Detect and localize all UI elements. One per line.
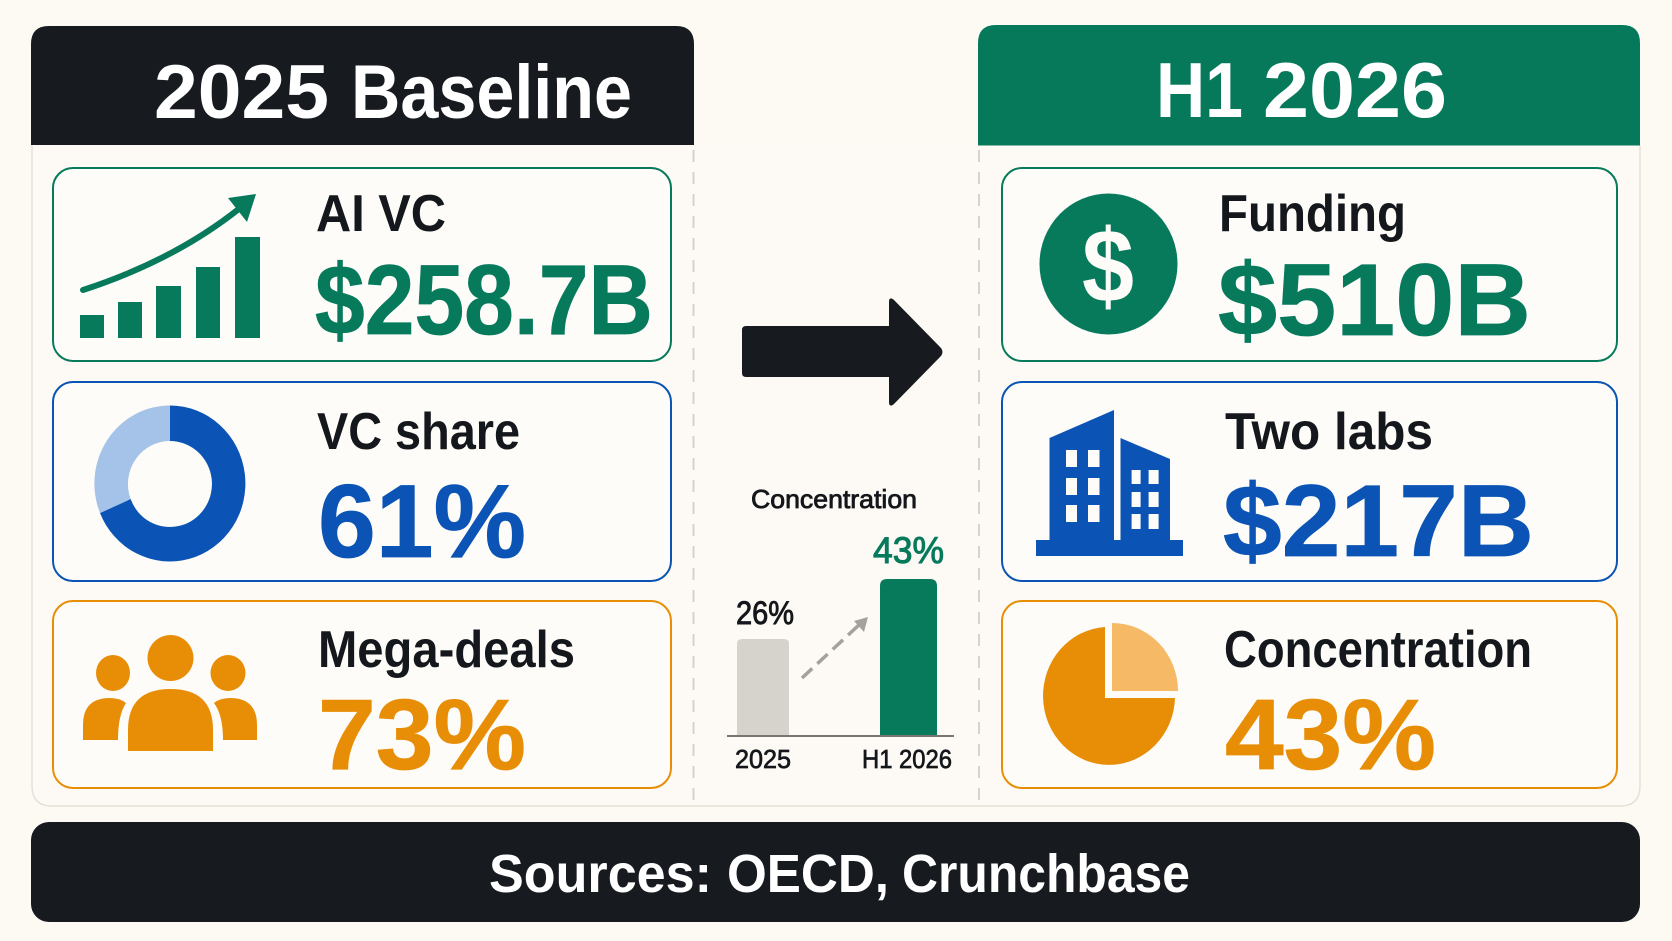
chart: concentration bar chart <box>727 484 954 774</box>
axis label: H1 2026: H1 2026 <box>862 744 952 774</box>
value: $510B: $510B <box>1218 243 1531 357</box>
icon: dollar coin: $ <box>1082 209 1134 325</box>
footer: sources <box>31 822 1640 922</box>
icon: rising bar chart with arrow <box>80 194 260 338</box>
axis label: 2025: 2025 <box>735 744 791 774</box>
arrow: dashed rise <box>802 617 868 678</box>
arrow: baseline to H1 2026 <box>742 298 942 406</box>
card: AI VC <box>53 168 671 361</box>
value: $258.7B: $258.7B <box>315 244 653 355</box>
icon: group of people <box>83 635 257 751</box>
heading: H1 2026: H1 <box>1156 46 1243 134</box>
bar: 2025 <box>737 639 789 736</box>
value: 26%: 26% <box>736 595 794 631</box>
value: 73%: 73% <box>318 679 526 791</box>
panel: 2025 baseline <box>31 26 694 791</box>
bar: H1 2026 <box>880 579 937 736</box>
chart title: Concentration <box>751 484 917 514</box>
label: Concentration: Concentration <box>1224 621 1532 679</box>
card: Mega-deals <box>53 601 671 791</box>
heading: H1 2026 <box>978 25 1640 146</box>
label: Funding: Funding <box>1219 185 1406 243</box>
icon: dollar coin <box>1040 194 1178 334</box>
value: 43%: 43% <box>873 530 944 571</box>
footer: sources: Sources: <box>489 844 712 904</box>
icon: office buildings <box>1036 410 1183 556</box>
icon: pie chart <box>1043 623 1178 765</box>
label: Mega-deals: Mega-deals <box>318 621 575 679</box>
label: VC share: VC share <box>317 403 520 461</box>
heading: 2025 Baseline: 2025 <box>154 50 329 135</box>
card: VC share <box>53 382 671 581</box>
icon: donut chart <box>94 405 245 561</box>
card: Two labs <box>1002 382 1617 581</box>
heading: H1 2026: 2026 <box>1263 46 1447 134</box>
footer: sources: Crunchbase <box>902 844 1190 904</box>
value: 43%: 43% <box>1225 679 1436 791</box>
label: AI VC: AI VC <box>316 185 446 243</box>
value: 61%: 61% <box>318 464 526 580</box>
value: $217B: $217B <box>1223 464 1534 578</box>
heading: 2025 Baseline: Baseline <box>351 50 632 135</box>
card: Concentration <box>1002 601 1617 791</box>
heading: 2025 Baseline <box>31 26 694 145</box>
panel: H1 2026 <box>978 25 1640 791</box>
footer: sources: OECD, <box>727 844 889 904</box>
card: Funding <box>1002 168 1617 361</box>
label: Two labs: Two labs <box>1225 403 1433 461</box>
